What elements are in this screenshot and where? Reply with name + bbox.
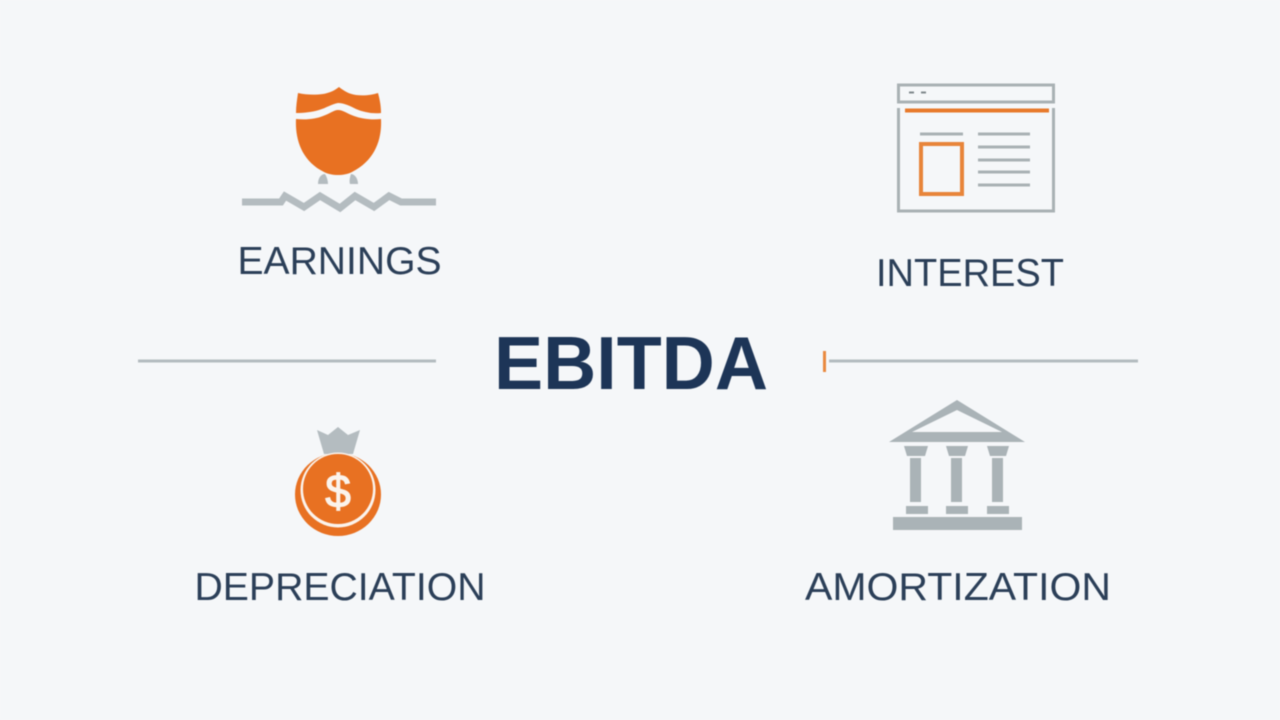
divider: left rule — [138, 360, 436, 362]
label: amortization: AMORTIZATION — [805, 566, 1111, 609]
label: earnings: EARNINGS — [238, 240, 442, 283]
icon: bank building — [889, 400, 1025, 530]
icon: shield over wavy line — [242, 87, 436, 208]
icon: browser window document — [898, 85, 1054, 211]
divider: right rule with orange tick — [823, 351, 1138, 372]
icon: dollar coin with crown — [295, 427, 381, 536]
label: interest: INTEREST — [876, 252, 1064, 295]
title: EBITDA — [494, 321, 768, 405]
label: depreciation: DEPRECIATION — [194, 566, 486, 609]
icon: dollar coin with crown: $ — [325, 465, 351, 517]
